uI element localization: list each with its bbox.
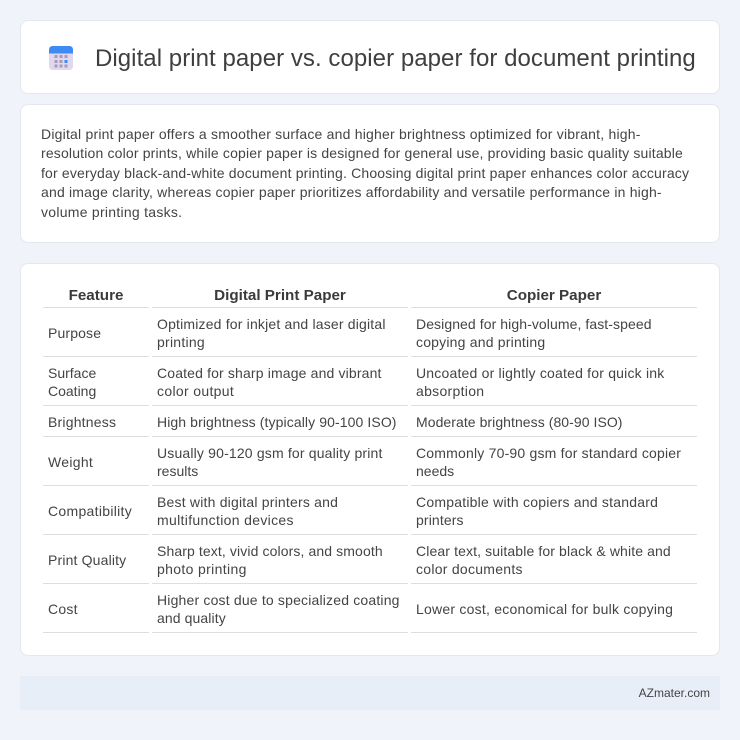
row: Brightness: Moderate brightness (80-90 ISO) bbox=[416, 414, 623, 430]
row: Purpose: printing bbox=[157, 334, 205, 350]
table header: Feature: Feature bbox=[69, 287, 123, 304]
row: Print Quality: Sharp text, vivid colors, and smooth bbox=[157, 543, 383, 559]
title: Digital print paper vs. copier paper for document printing bbox=[95, 45, 696, 72]
panel: comparison table bbox=[20, 263, 720, 656]
footer credit: AZmater.com bbox=[639, 686, 710, 700]
row: Print Quality: photo printing bbox=[157, 561, 247, 577]
row: Cost: Higher cost due to specialized coating bbox=[157, 592, 400, 608]
row: Surface Coating: Surface bbox=[48, 365, 96, 381]
row: Surface Coating: Uncoated or lightly coated for quick ink bbox=[416, 365, 664, 381]
footer bar bbox=[20, 676, 720, 710]
row: Brightness bbox=[48, 414, 623, 430]
row: Cost bbox=[48, 592, 673, 626]
summary text: for everyday black-and-white document printing. Choosing digital print paper enhances color accuracy bbox=[41, 165, 689, 181]
row: Cost: Lower cost, economical for bulk copying bbox=[416, 601, 673, 617]
summary text: volume printing tasks. bbox=[41, 204, 182, 220]
row: Cost: and quality bbox=[157, 610, 226, 626]
summary text: resolution color prints, while copier paper is designed for general use, providing basic quality suitable bbox=[41, 145, 683, 161]
row: Print Quality: Print Quality bbox=[48, 552, 126, 568]
row: Print Quality: Clear text, suitable for black & white and bbox=[416, 543, 671, 559]
row: Surface Coating: color output bbox=[157, 383, 234, 399]
row: Surface Coating: Coating bbox=[48, 383, 96, 399]
row: Surface Coating bbox=[48, 365, 664, 399]
row: Weight: Usually 90-120 gsm for quality print bbox=[157, 445, 383, 461]
row: Weight: needs bbox=[416, 463, 454, 479]
row: Compatibility: Compatibility bbox=[48, 503, 132, 519]
summary text bbox=[41, 126, 689, 220]
row: Compatibility: printers bbox=[416, 512, 464, 528]
row: Compatibility bbox=[48, 494, 658, 528]
row: Weight: results bbox=[157, 463, 198, 479]
row: Purpose: copying and printing bbox=[416, 334, 545, 350]
row: Purpose bbox=[48, 316, 652, 350]
row: Purpose: Purpose bbox=[48, 325, 101, 341]
row: Print Quality bbox=[48, 543, 671, 577]
summary text: Digital print paper offers a smoother surface and higher brightness optimized for vibrant, high- bbox=[41, 126, 641, 142]
table header: Digital Print Paper: Digital Print Paper bbox=[214, 287, 346, 304]
row: Compatibility: Best with digital printers and bbox=[157, 494, 338, 510]
row: Surface Coating: Coated for sharp image and vibrant bbox=[157, 365, 382, 381]
table header: Copier Paper: Copier Paper bbox=[507, 287, 601, 304]
summary text: and image clarity, whereas copier paper prioritizes affordability and versatile performance in high- bbox=[41, 184, 662, 200]
row: Weight: Weight bbox=[48, 454, 93, 470]
header card bbox=[20, 20, 720, 94]
row: Surface Coating: absorption bbox=[416, 383, 484, 399]
icon: calendar bbox=[49, 46, 73, 70]
row: Compatibility: multifunction devices bbox=[157, 512, 294, 528]
row: Compatibility: Compatible with copiers and standard bbox=[416, 494, 658, 510]
panel: summary bbox=[20, 104, 720, 243]
row: Brightness: Brightness bbox=[48, 414, 116, 430]
row: Print Quality: color documents bbox=[416, 561, 523, 577]
row: Purpose: Optimized for inkjet and laser digital bbox=[157, 316, 386, 332]
row: Purpose: Designed for high-volume, fast-speed bbox=[416, 316, 652, 332]
row: Weight: Commonly 70-90 gsm for standard copier bbox=[416, 445, 681, 461]
row: Weight bbox=[48, 445, 681, 479]
row: Brightness: High brightness (typically 90-100 ISO) bbox=[157, 414, 397, 430]
row: Cost: Cost bbox=[48, 601, 78, 617]
